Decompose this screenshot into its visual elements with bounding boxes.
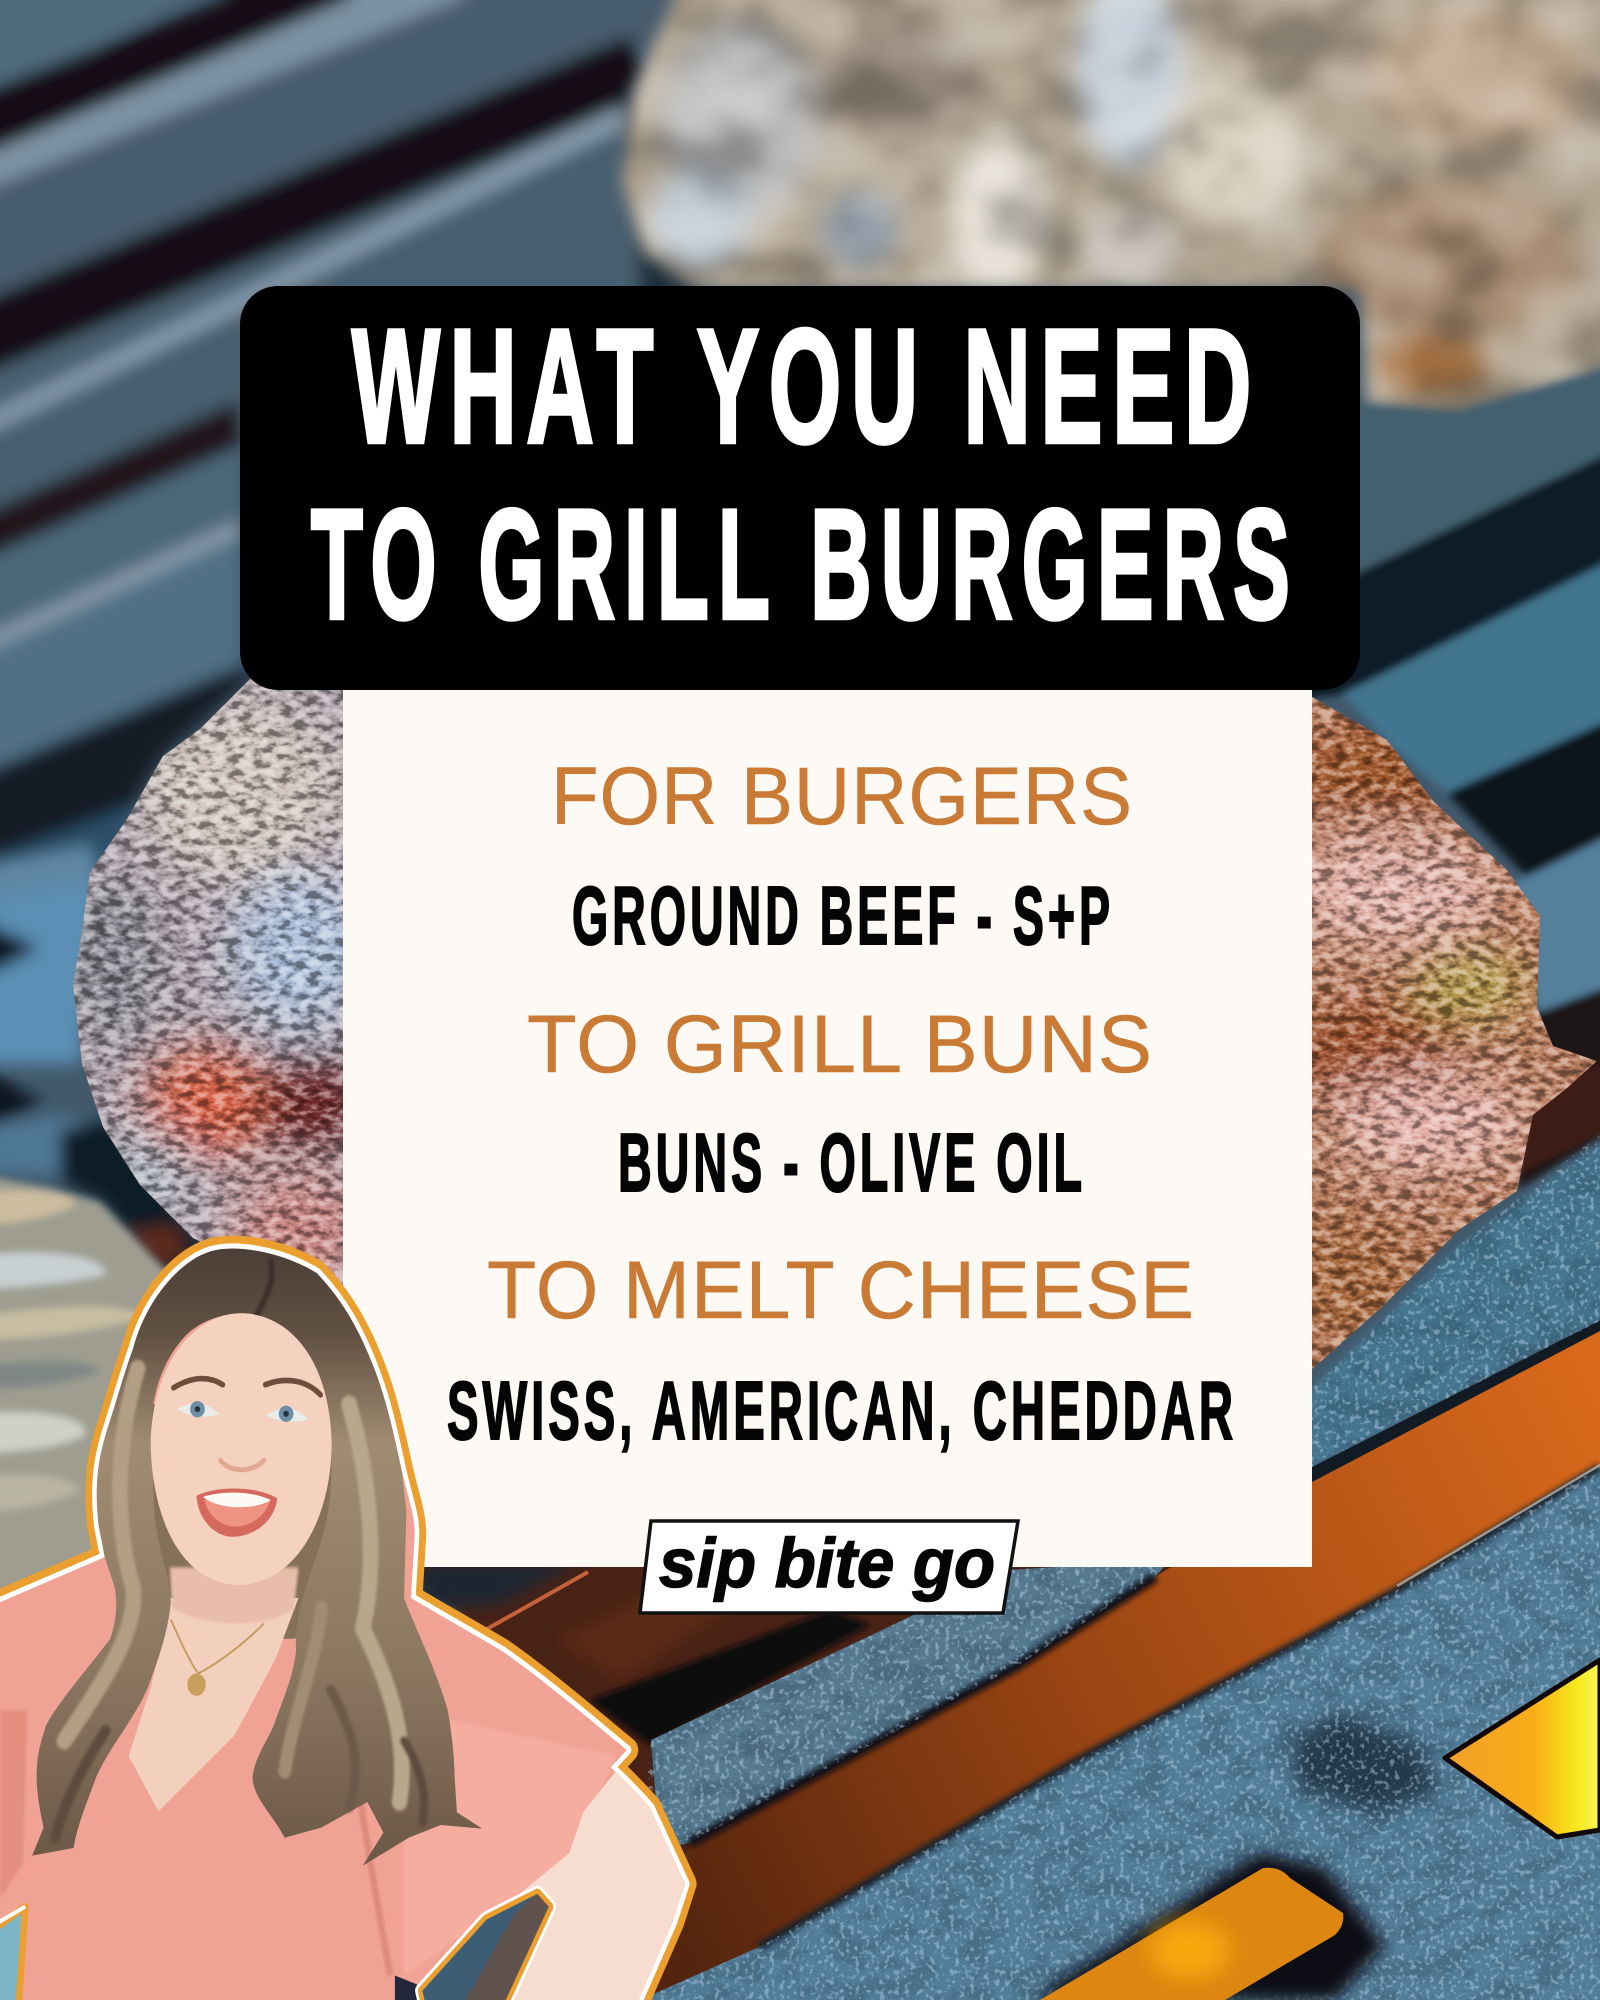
neck and chest	[129, 1598, 298, 1811]
burger patty left	[73, 678, 343, 1286]
necklace	[171, 1619, 264, 1673]
hair highlights	[55, 1261, 424, 1838]
burger patty right	[1312, 697, 1597, 1370]
gap between arm and waist	[422, 1894, 549, 2000]
hair	[32, 1249, 482, 1866]
logo: sip bite go: sip bite go	[659, 1524, 995, 1602]
title banner	[240, 286, 1360, 690]
top-left grates	[0, 0, 700, 1290]
eyebrows	[174, 1379, 223, 1388]
icon: blurred bun lower left	[0, 1171, 210, 1620]
mouth	[197, 1489, 277, 1537]
jeans waist	[394, 1976, 418, 2000]
heading: to grill buns: TO GRILL BUNS	[527, 999, 1153, 1090]
face	[151, 1313, 332, 1585]
sticker outline	[0, 1249, 685, 2000]
gap at left elbow	[0, 1907, 25, 2000]
text: burger ingredients: GROUND BEEF - S+P	[572, 869, 1114, 962]
right-side grates	[1300, 360, 1600, 1475]
nose	[220, 1460, 264, 1470]
text: bun ingredients: BUNS - OLIVE OIL	[618, 1116, 1086, 1209]
icon: flame slot bottom	[1030, 1852, 1385, 2000]
person: smiling woman in pink top	[0, 1231, 698, 2000]
shirt	[0, 1231, 698, 2000]
top-right blurred patty	[600, 0, 1600, 440]
panel: ingredient list	[343, 690, 1312, 1567]
icon: flame slot right	[1445, 1660, 1600, 1837]
eyes	[177, 1403, 219, 1417]
arm	[514, 1772, 685, 2000]
heading: to melt cheese: TO MELT CHEESE	[487, 1245, 1195, 1336]
heading: for burgers: FOR BURGERS	[551, 751, 1133, 842]
hair behind head	[152, 1404, 332, 1639]
lower grates and fire	[400, 1560, 1200, 1880]
